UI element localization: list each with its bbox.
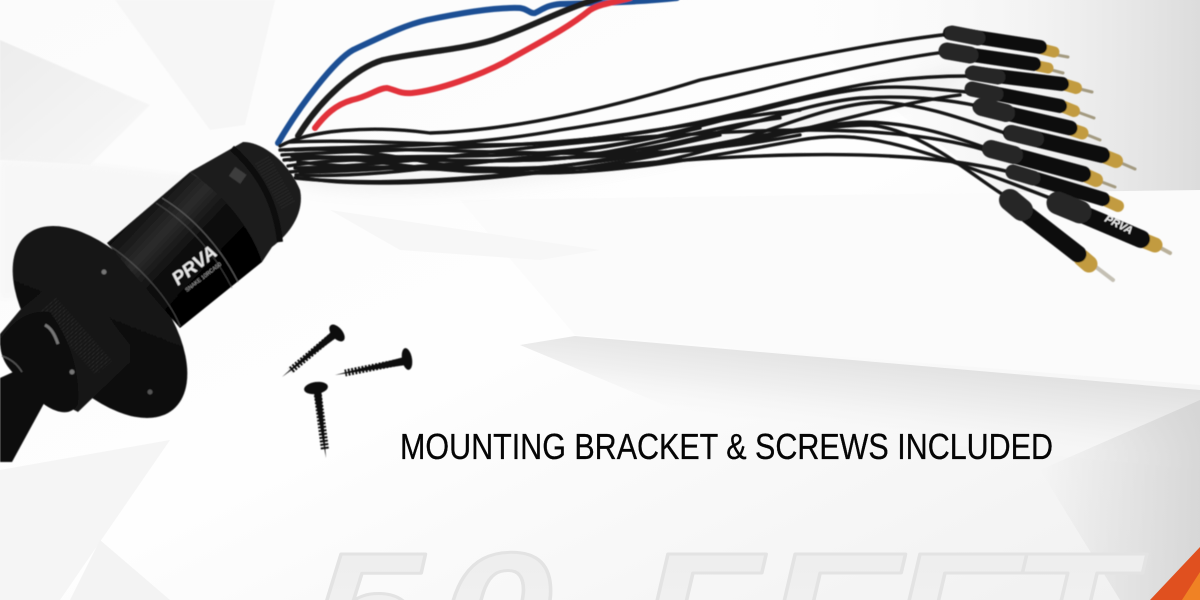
barrel logo: SNAKE 10RCA50 (185, 262, 223, 294)
caption: MOUNTING BRACKET & SCREWS INCLUDED (400, 426, 1053, 467)
screws (282, 322, 414, 458)
plug 3 (972, 73, 1092, 92)
main barrel (107, 172, 262, 328)
screw 1 (282, 322, 348, 377)
upper gland nut (190, 142, 301, 262)
cable (0, 368, 48, 462)
lower gland nut (0, 282, 130, 412)
black signal wire bundle (280, 34, 1050, 198)
blue wire (278, 0, 677, 143)
screw 3 (303, 380, 329, 458)
shadows under wires (300, 75, 960, 183)
barrel logo: PRVA (168, 242, 222, 290)
plug 2 (946, 51, 1063, 73)
barrel highlight rings (110, 198, 238, 326)
plug brand: PRVA (1103, 213, 1135, 237)
plug 10 (1010, 200, 1113, 280)
mounting flange (0, 195, 221, 449)
plug 8 (1013, 172, 1118, 206)
plug 4 (972, 89, 1094, 118)
connector assembly (0, 142, 301, 462)
black wire (298, 0, 600, 136)
red wire (315, 0, 630, 128)
plug 9 (1056, 203, 1170, 253)
plug 1 (950, 33, 1068, 57)
plug 7 (990, 149, 1115, 187)
screw 2 (335, 347, 414, 375)
RCA plugs (946, 33, 1170, 280)
plug 5 (980, 107, 1100, 140)
coloured power wires (278, 0, 677, 143)
orange corner accent (1150, 547, 1200, 600)
plug 6 (1011, 133, 1135, 169)
